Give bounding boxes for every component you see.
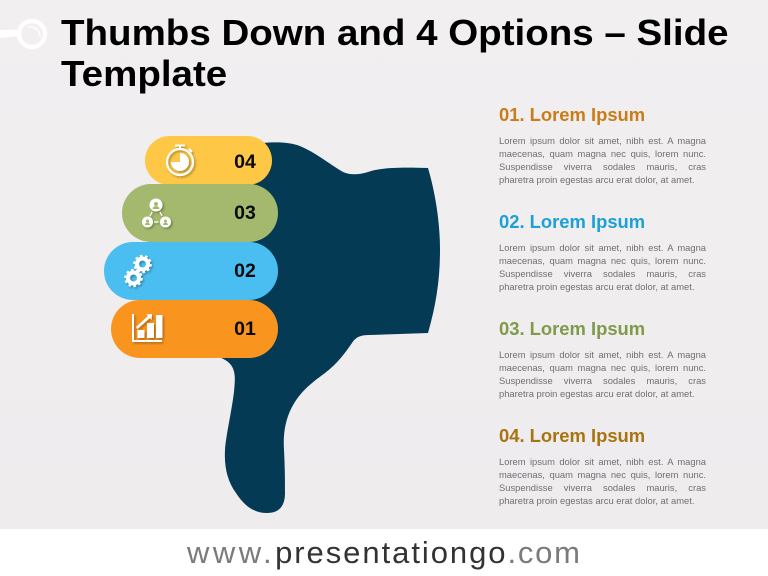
text: option 03: pharetra proin egestas arcu erat dolor, at amet.	[499, 388, 694, 399]
text: option 04: maecenas, quam magna nec quis, lorem nunc.	[499, 469, 706, 480]
text: option 01: maecenas, quam magna nec quis, lorem nunc.	[499, 148, 706, 159]
pill 04	[145, 136, 272, 185]
text: option 03: Lorem ipsum dolor sit amet, nibh est. A magna	[499, 349, 706, 360]
text: option 02: Lorem ipsum dolor sit amet, nibh est. A magna	[499, 242, 706, 253]
number 04: 04	[234, 151, 256, 173]
text: option 01: pharetra proin egestas arcu erat dolor, at amet.	[499, 174, 694, 185]
text: option 02	[499, 242, 706, 292]
text: option 04: pharetra proin egestas arcu erat dolor, at amet.	[499, 495, 694, 506]
icon: stopwatch	[167, 146, 193, 175]
number 03: 03	[234, 202, 256, 224]
text: option 04: Lorem ipsum dolor sit amet, nibh est. A magna	[499, 456, 706, 467]
text: option 01	[499, 135, 706, 185]
heading: option 03: 03. Lorem Ipsum	[499, 318, 645, 339]
text: option 04: Suspendisse viverra sodales mauris, cras	[499, 482, 706, 493]
text: option 01: Lorem ipsum dolor sit amet, nibh est. A magna	[499, 135, 706, 146]
text: option 03	[499, 349, 706, 399]
text: option 03: Suspendisse viverra sodales mauris, cras	[499, 375, 706, 386]
pill 02	[104, 242, 278, 300]
number 02: 02	[234, 260, 256, 282]
title	[61, 12, 729, 94]
number 01: 01	[234, 318, 256, 340]
footer url: www.presentationgo.com	[187, 535, 582, 570]
text: option 02: pharetra proin egestas arcu erat dolor, at amet.	[499, 281, 694, 292]
text: option 01: Suspendisse viverra sodales mauris, cras	[499, 161, 706, 172]
heading: option 04: 04. Lorem Ipsum	[499, 425, 645, 446]
text: option 03: maecenas, quam magna nec quis, lorem nunc.	[499, 362, 706, 373]
title: Thumbs Down and 4 Options – Slide	[61, 12, 729, 53]
title: Template	[61, 53, 227, 94]
pill 01	[111, 300, 278, 358]
icon: people network	[142, 198, 171, 228]
icon: magnifier tab	[0, 19, 47, 49]
text: option 02: maecenas, quam magna nec quis, lorem nunc.	[499, 255, 706, 266]
pill 03	[122, 184, 278, 242]
text: option 04	[499, 456, 706, 506]
footer band	[0, 529, 768, 576]
icon: gears	[126, 256, 150, 286]
heading: option 01: 01. Lorem Ipsum	[499, 104, 645, 125]
icon: bar chart	[132, 314, 162, 342]
hand shape	[215, 142, 440, 513]
heading: option 02: 02. Lorem Ipsum	[499, 211, 645, 232]
text: option 02: Suspendisse viverra sodales mauris, cras	[499, 268, 706, 279]
